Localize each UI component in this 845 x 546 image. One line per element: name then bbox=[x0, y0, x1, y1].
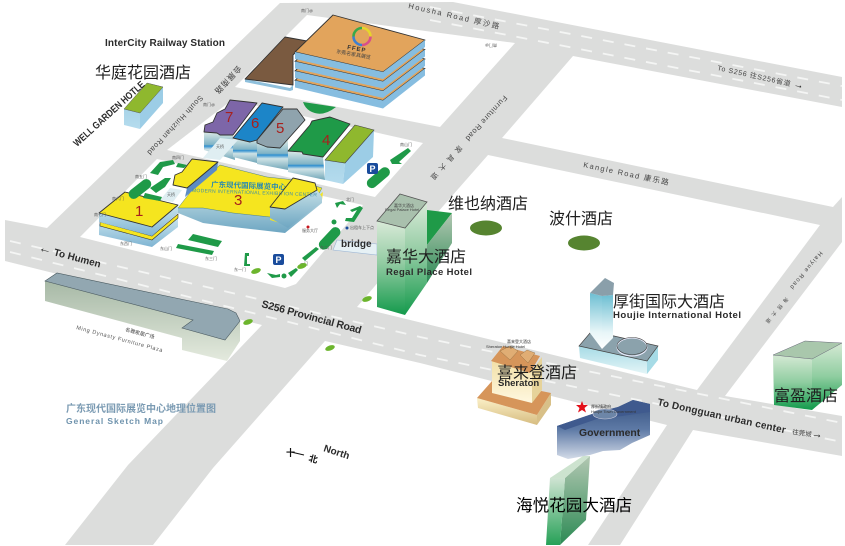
tiny gate labels: 南山门 bbox=[400, 141, 412, 147]
building: FFEP hall bbox=[295, 15, 425, 108]
label: Railway station: InterCity Railway Station bbox=[105, 38, 225, 49]
tiny gate labels: 东三门 bbox=[205, 255, 217, 261]
tiny gate labels: 东西门 bbox=[120, 240, 132, 246]
icon: parking near hall 4 bbox=[367, 163, 378, 174]
bridge between halls: 天桥 bbox=[216, 143, 224, 149]
road label: To S256: To S256 往S256省道 → bbox=[716, 62, 805, 92]
compass north: 十 bbox=[286, 447, 295, 458]
building: Government: Government bbox=[579, 428, 641, 439]
building: Well Garden Hotel bbox=[124, 83, 163, 129]
tiny gate labels: 南四门 bbox=[172, 154, 184, 160]
icon: parking south of hall 3: P bbox=[276, 255, 282, 265]
label: Regal hotel English: Regal Place Hotel bbox=[386, 267, 472, 278]
hall 5: 5 bbox=[276, 120, 284, 137]
hall 3 Chinese name: 广东现代国际展览中心 bbox=[211, 179, 287, 192]
building: right wing of hall 3 bbox=[270, 178, 323, 228]
hall lime annex bbox=[325, 125, 374, 184]
building: hall 1: 1 bbox=[135, 203, 143, 220]
hall 3 English name: MODERN INTERNATIONAL EXHIBITION CENTER bbox=[192, 188, 317, 198]
road label: Housha Road: Housha Road 厚沙路 bbox=[408, 0, 501, 31]
marker: Bosh hotel bbox=[568, 236, 600, 250]
road label: S256 Provincial Road: S256 Provincial Road bbox=[260, 298, 363, 337]
label: town government tiny: 厚街镇政府 bbox=[591, 403, 611, 409]
map title bbox=[66, 402, 216, 426]
road label: Furniture Road: Furniture Road bbox=[464, 94, 509, 143]
building: hall 3 bbox=[178, 165, 322, 233]
tiny gate labels: 服务大厅 bbox=[302, 227, 318, 233]
label: Sheraton Chinese: 喜来登酒店 bbox=[497, 364, 577, 382]
marker: Vienna hotel bbox=[470, 220, 502, 236]
hall 4 bbox=[288, 117, 350, 180]
label: Fuying Hotel: 富盈酒店 bbox=[774, 387, 838, 405]
FFEP text: FFEP bbox=[347, 45, 367, 54]
label: Vienna hotel: 维也纳酒店 bbox=[448, 195, 528, 213]
icon: info points bbox=[306, 226, 348, 230]
label: Well Garden English: WELL GARDEN HOTLE bbox=[72, 79, 148, 149]
road label: Haiyue Road Chinese: 海悦大道 bbox=[761, 296, 790, 328]
hall 7: 7 bbox=[225, 109, 233, 126]
hall 6 bbox=[233, 103, 283, 163]
tiny gate labels: 一门 bbox=[300, 260, 308, 266]
building: Haiyue Garden Hotel bbox=[546, 456, 590, 545]
tiny gate labels: 东二门 bbox=[320, 244, 332, 250]
building: Regal Place Hotel bbox=[377, 194, 452, 315]
road label: to Guancheng: 往莞城→ bbox=[792, 425, 823, 441]
building: hall 3: 3 bbox=[234, 192, 242, 209]
map title: General Sketch Map bbox=[66, 416, 163, 426]
bridge between halls bbox=[160, 138, 238, 202]
building: Sheraton bbox=[477, 338, 551, 425]
tiny gate labels: 北门 bbox=[346, 196, 354, 202]
building: Regal Place Hotel: 嘉华大酒店 bbox=[394, 202, 414, 208]
building: Regal Place Hotel: Regal Palace Hotel bbox=[385, 207, 419, 212]
label: Ming plaza Chinese: 名雅家居广场 bbox=[124, 326, 155, 341]
bridge walkway: bridge bbox=[341, 239, 372, 250]
road label: To Dongguan urban center: To Dongguan urban center bbox=[656, 397, 787, 436]
label: Sheraton English: Sheraton bbox=[498, 378, 539, 389]
building: Fuying Hotel bbox=[773, 341, 842, 410]
icon: FFEP ring logo bbox=[354, 28, 370, 45]
icon: parking near hall 4: P bbox=[370, 164, 376, 174]
tiny gate labels: 南七门 bbox=[94, 211, 106, 217]
green lawn bbox=[303, 102, 336, 114]
compass north: 北 bbox=[308, 452, 319, 465]
hall 7 bbox=[204, 100, 257, 160]
tiny gate labels: 南六门 bbox=[112, 195, 124, 201]
tiny station signs: 南门@ bbox=[203, 101, 215, 107]
hall 4: 4 bbox=[322, 132, 330, 149]
label: Haiyue Garden Hotel: 海悦花园大酒店 bbox=[516, 496, 632, 515]
road label: To Humen: ← To Humen bbox=[37, 239, 103, 270]
map title: 广东现代国际展览中心地理位置图 bbox=[66, 402, 216, 415]
tiny station signs: 南门@ bbox=[485, 43, 497, 49]
label: town government tiny: Houjie Town Government bbox=[591, 409, 637, 414]
label: Bosh hotel: 波什酒店 bbox=[549, 210, 613, 228]
green parking strips bbox=[127, 148, 411, 278]
compass north: North bbox=[322, 443, 351, 462]
label: Houjie hotel Chinese: 厚街国际大酒店 bbox=[613, 293, 725, 311]
tiny gate labels bbox=[94, 141, 412, 272]
compass north bbox=[286, 443, 351, 465]
hall 6: 6 bbox=[251, 115, 259, 132]
icon: parking south of hall 3 bbox=[273, 254, 284, 265]
label: Well Garden Chinese: 华庭花园酒店 bbox=[95, 64, 191, 82]
building: Sheraton: 喜来登大酒店 bbox=[507, 338, 531, 344]
tiny gate labels: 东一门 bbox=[234, 266, 246, 272]
road label: Kangle Road: Kangle Road 康乐路 bbox=[583, 159, 670, 187]
building: Government bbox=[557, 400, 650, 459]
label: Houjie hotel English: Houjie International Hotel bbox=[613, 310, 741, 321]
building: Ming Dynasty Furniture Plaza bbox=[45, 273, 240, 361]
tiny station signs: 南门@ bbox=[301, 7, 313, 13]
FFEP Chinese text: 东莞名家具展览 bbox=[336, 48, 371, 61]
building: FFEP brown annex bbox=[245, 37, 307, 91]
label: Regal hotel Chinese: 嘉华大酒店 bbox=[386, 248, 466, 266]
hall 5 bbox=[257, 109, 305, 170]
tiny gate labels: 东山门 bbox=[160, 245, 172, 251]
bridge walkway bbox=[333, 239, 377, 255]
tiny station signs bbox=[203, 7, 497, 107]
bridge between halls: 天桥 bbox=[167, 191, 175, 197]
building: Houjie International Hotel bbox=[579, 278, 658, 374]
building: hall 2 bbox=[173, 159, 218, 197]
label: town government tiny bbox=[591, 403, 637, 414]
road label: South Huizhan Road: South Huizhan Road bbox=[145, 94, 205, 157]
building: hall 1 bbox=[99, 192, 178, 247]
icon: red star bbox=[576, 401, 588, 412]
road label: Furniture Road Chinese: 家具大道 bbox=[425, 144, 464, 185]
road label: Haiyue Road: Haiyue Road bbox=[788, 250, 823, 290]
road label: South Huizhan Road Chinese: 会展南路 bbox=[212, 64, 244, 97]
tiny gate labels: 出租车上下点 bbox=[350, 224, 374, 230]
building: Sheraton: Sheraton Houjie Hotel bbox=[486, 344, 525, 349]
label: Ming plaza English: Ming Dynasty Furniture Plaza bbox=[75, 325, 164, 354]
building: exhibition halls 4 to 7 bbox=[204, 100, 374, 184]
tiny gate labels: 南五门 bbox=[135, 173, 147, 179]
green road logos bbox=[242, 262, 373, 352]
